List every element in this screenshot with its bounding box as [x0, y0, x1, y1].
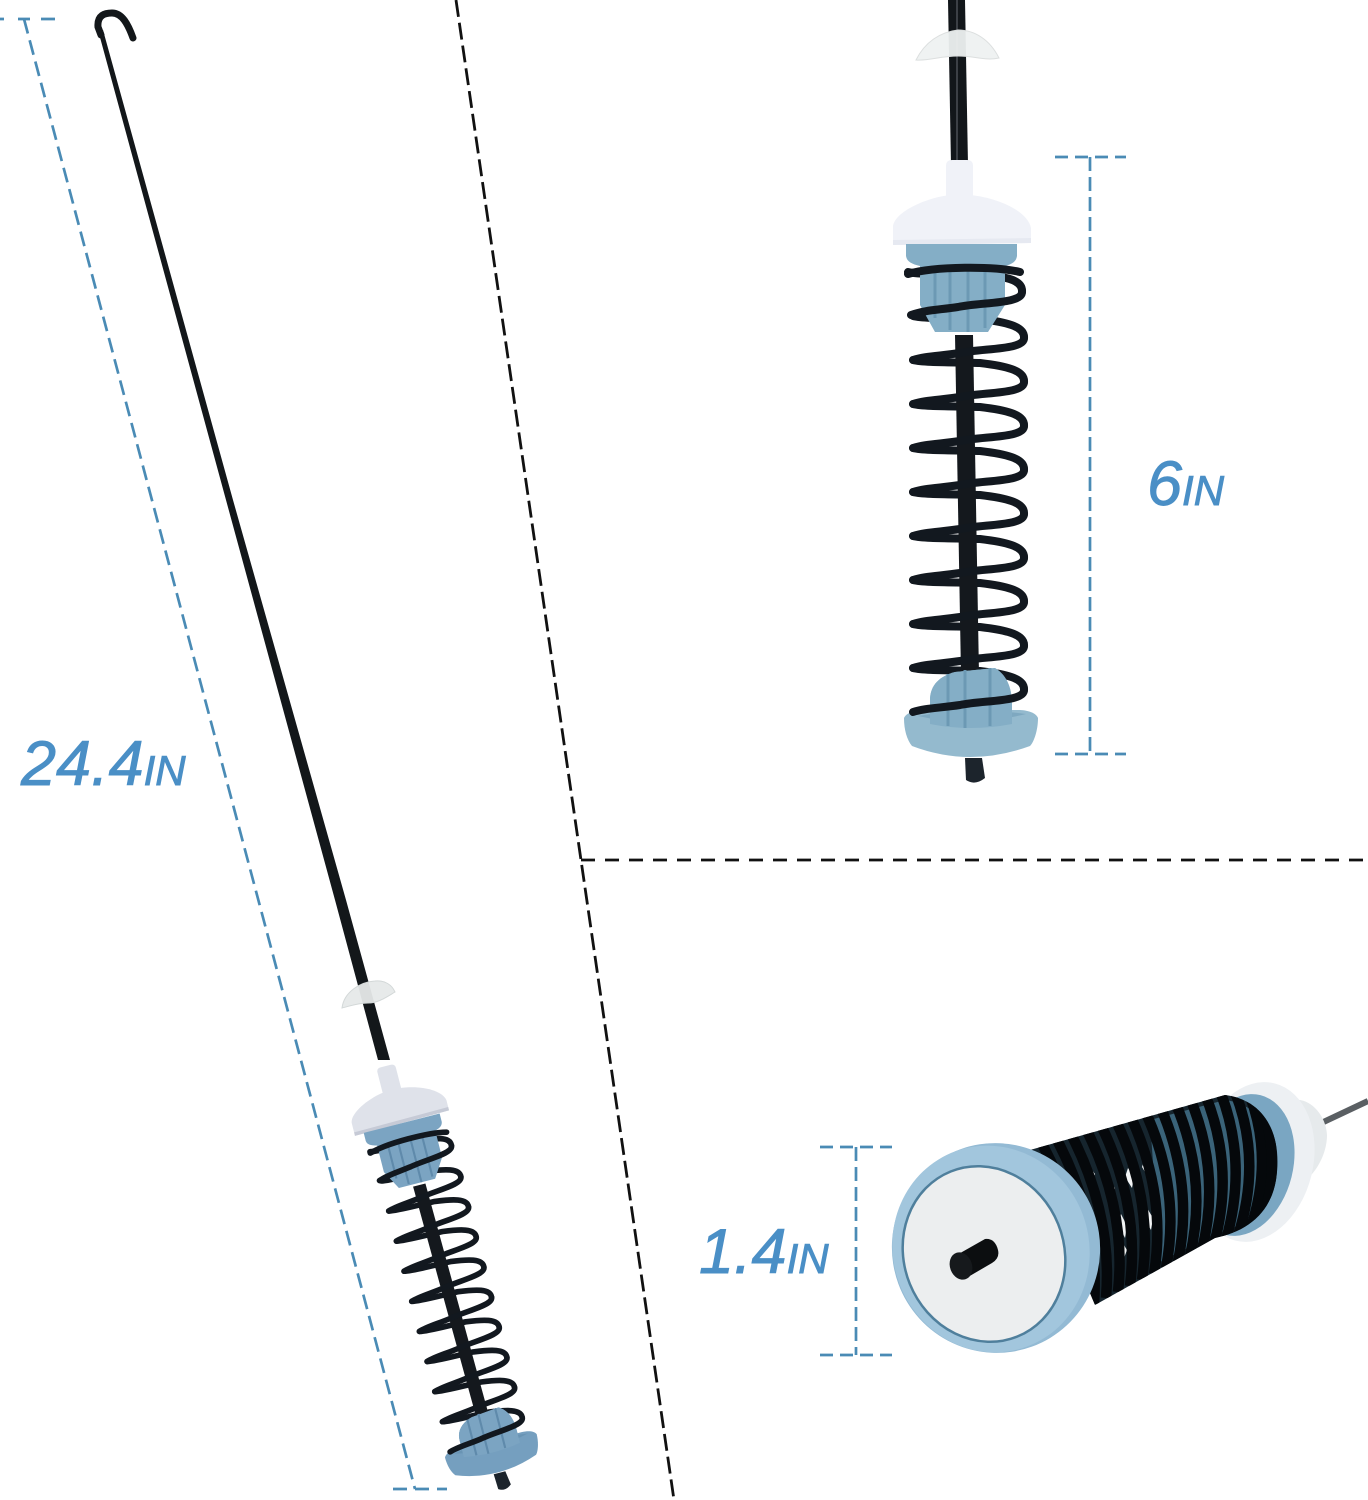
centre pin	[946, 1239, 998, 1283]
hook	[98, 13, 133, 38]
end view of spring assembly	[892, 1082, 1368, 1353]
blue end disc rim	[862, 1114, 1130, 1382]
dimension line: 6 inch length	[1055, 157, 1126, 754]
long rod	[98, 30, 390, 1060]
dimension line: 24.4 inch length	[0, 19, 447, 1489]
close-up: spring 6 inch	[893, 0, 1038, 783]
spring assembly	[893, 160, 1038, 783]
label: 6 inches: 6IN	[1147, 449, 1225, 519]
rod	[1315, 1101, 1368, 1126]
clear washer	[342, 981, 395, 1008]
full suspension rod, tilted	[98, 13, 548, 1500]
spring body	[1030, 1091, 1277, 1310]
metal end face	[876, 1142, 1092, 1366]
spring assembly	[340, 1052, 548, 1500]
white rear cap	[1179, 1069, 1331, 1255]
divider: vertical dashed line	[456, 0, 674, 1500]
dimension line: 1.4 inch diameter	[820, 1147, 892, 1355]
blue rear ring	[1177, 1083, 1309, 1247]
divider: horizontal dashed line	[581, 859, 1368, 861]
label: 24.4 inches: 24.4IN	[20, 729, 186, 799]
clear washer	[916, 30, 999, 60]
upper rod	[948, 0, 968, 165]
label: 1.4 inches: 1.4IN	[699, 1217, 829, 1287]
